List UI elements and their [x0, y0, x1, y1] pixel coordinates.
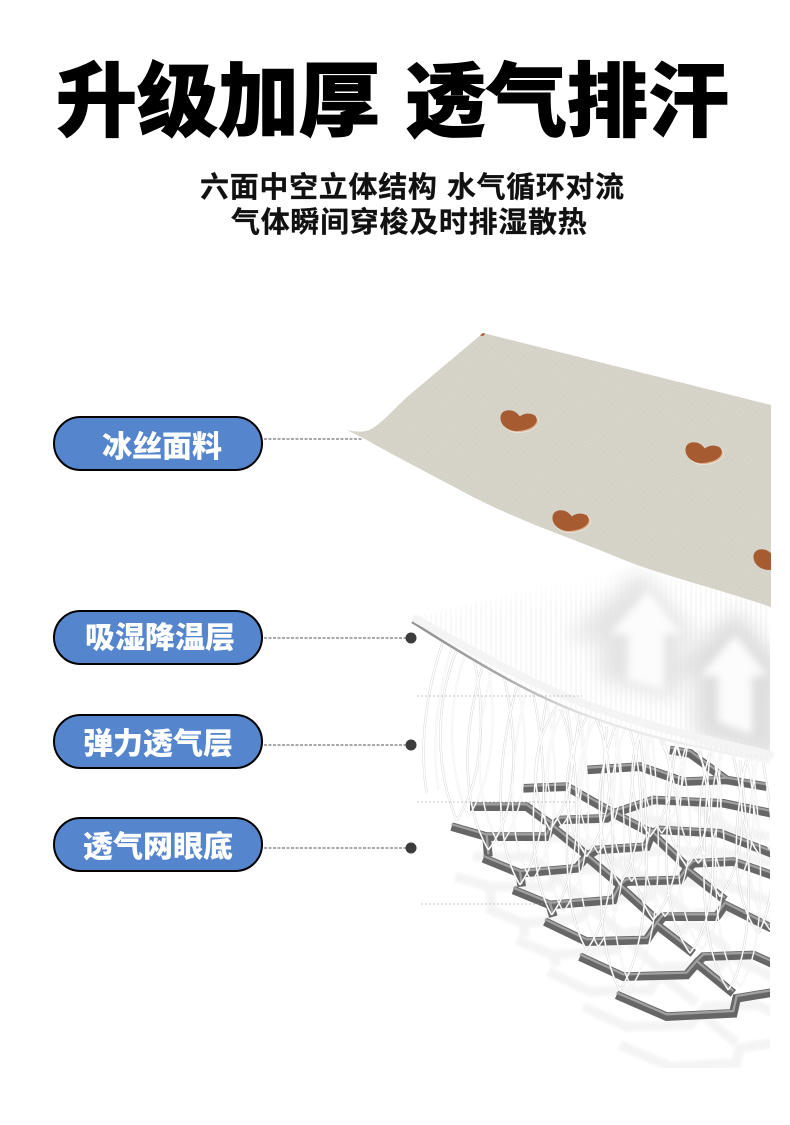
honeycomb mesh base: [452, 748, 772, 1017]
heart: [480, 333, 485, 336]
subtitle text: 气体瞬间穿梭及时排湿散热: [231, 206, 587, 239]
title: 升级加厚透气排汗: [56, 58, 729, 148]
label: ice silk fabric: [54, 417, 362, 470]
heart: [552, 510, 590, 532]
upward air arrows: [573, 572, 770, 762]
heart: [685, 442, 723, 464]
label: elastic breathable layer: 弹力透气层: [83, 728, 233, 761]
subtitle text: 水气循环对流: [447, 171, 625, 204]
heart: [500, 410, 538, 432]
mesh shadow on ground: [455, 800, 775, 1067]
elastic fibres: [424, 637, 784, 990]
ice silk fabric: [347, 330, 790, 607]
faint dotted guides: [417, 696, 582, 904]
label: breathable mesh base: 透气网眼底: [83, 831, 233, 864]
label: ice silk fabric: 冰丝面料: [102, 431, 222, 464]
label: moisture-wicking cooling layer: [54, 611, 416, 664]
moisture-wicking layer: [411, 572, 774, 764]
subtitle text: 六面中空立体结构: [200, 171, 438, 204]
heart: [753, 549, 771, 570]
layered material diagram: [347, 330, 790, 1067]
label: breathable mesh base: [54, 818, 416, 871]
subtitle text: [200, 171, 625, 239]
label: moisture-wicking cooling layer: 吸湿降温层: [85, 622, 235, 655]
label: elastic breathable layer: [54, 715, 416, 768]
